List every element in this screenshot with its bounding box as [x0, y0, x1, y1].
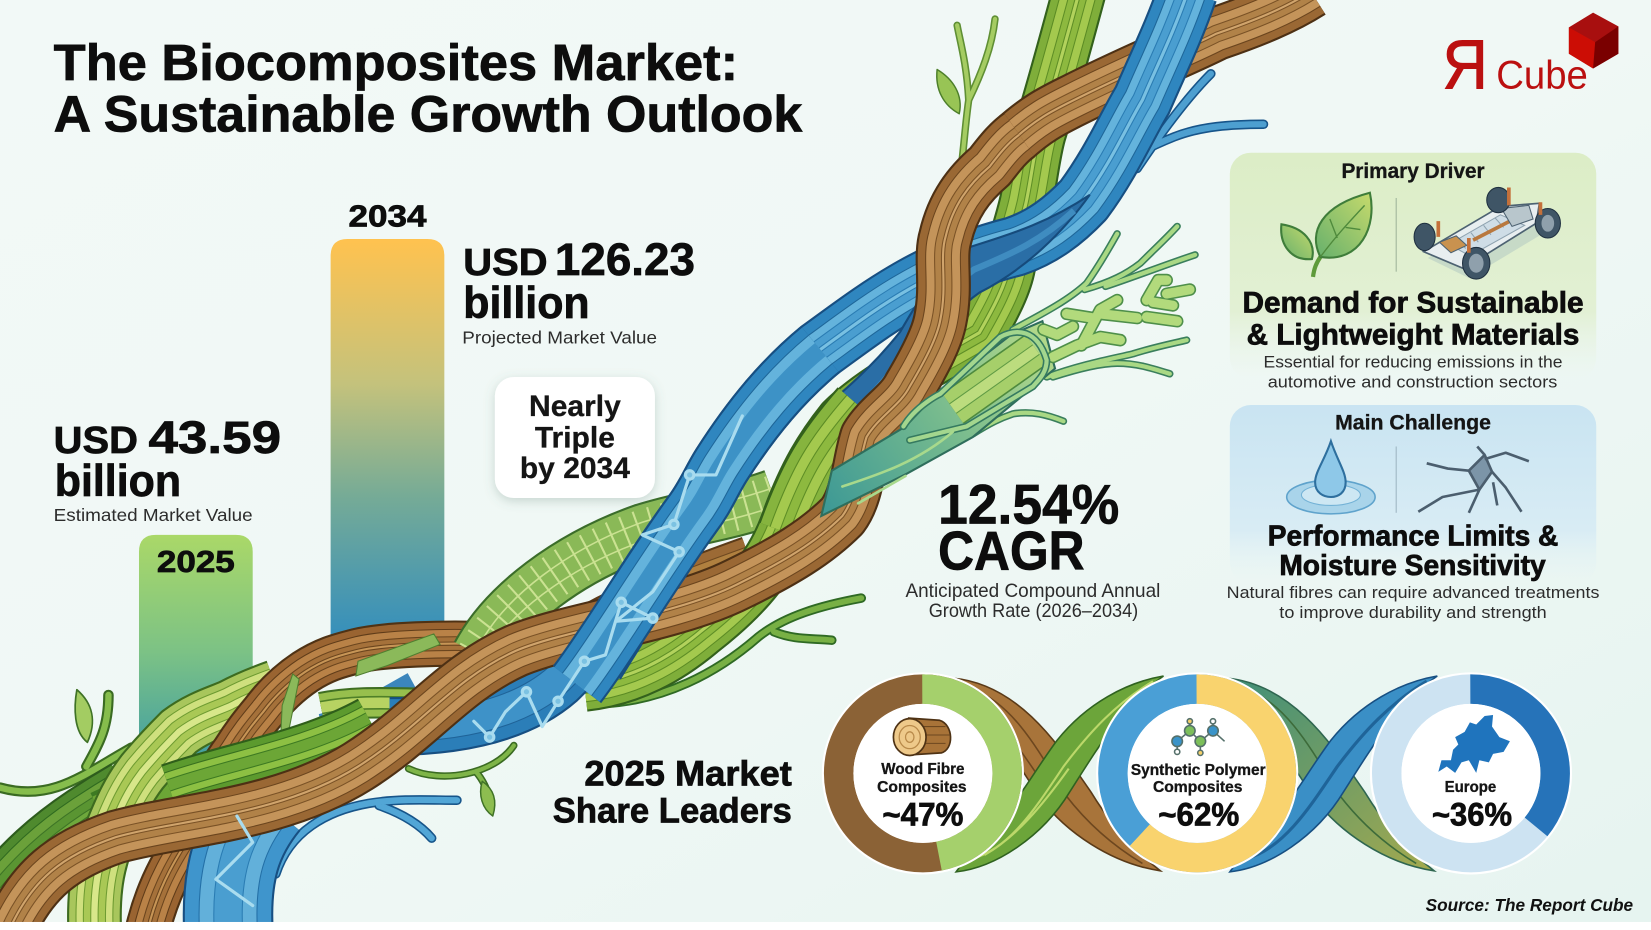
vine: left with leaf — [0, 690, 132, 792]
logo: RCube: Я — [1443, 25, 1488, 103]
strand: brown arch — [147, 644, 495, 930]
stat: CAGR: CAGR — [938, 520, 1085, 582]
frayed algae fibre bundle — [821, 226, 1195, 516]
strand: green over dark blue — [784, 405, 858, 532]
heading: demand: Demand for Sustainable — [1242, 287, 1584, 320]
strand: blue bottom — [228, 802, 265, 930]
vine: top with leaf — [937, 19, 995, 216]
donut: synthetic polymer composites: Composites — [1153, 779, 1242, 796]
description: challenge: Natural fibres can require advanced treatments — [1227, 583, 1599, 602]
donut: wood fibre composites: Composites — [877, 779, 967, 796]
ribbon: blue connector — [1230, 676, 1437, 872]
heading: performance limits: Performance Limits & — [1268, 520, 1558, 552]
heading: performance limits — [1268, 520, 1558, 582]
icon: water drop — [1287, 441, 1375, 514]
callout: nearly triple: by 2034 — [520, 452, 630, 485]
fraying blue fibres top — [1095, 74, 1264, 184]
stat: USD 43.59 billion: 43.59 — [148, 412, 281, 463]
strand: mid green horizontal — [168, 718, 369, 786]
description: driver: automotive and construction sectors — [1268, 373, 1557, 392]
stat: CAGR — [906, 472, 1160, 622]
strand: dark blue band — [827, 195, 1090, 442]
stat: USD 43.59 billion: billion — [55, 457, 181, 506]
divider — [1395, 446, 1397, 513]
heading: market share leaders: 2025 Market — [584, 756, 792, 794]
heading: performance limits: Moisture Sensitivity — [1279, 550, 1546, 582]
algae loop — [842, 332, 1047, 503]
title: A Sustainable Growth Outlook — [54, 86, 803, 143]
stat: USD 126.23 billion: Projected Market Value — [462, 327, 657, 347]
strand: mid green behind — [100, 781, 184, 813]
description: driver — [1264, 352, 1563, 392]
fibre braid illustration — [0, 0, 1311, 930]
strand: brown lower back — [569, 553, 748, 632]
icon: leaf — [1281, 193, 1372, 277]
donut: wood fibre composites: ~47% — [882, 796, 963, 833]
description: challenge: to improve durability and strength — [1279, 603, 1547, 622]
algae inner bundle — [953, 350, 1036, 409]
strand: blue lower section — [390, 632, 605, 727]
strand: light green — [94, 687, 276, 930]
icon: log — [893, 718, 951, 756]
vine: right middle — [605, 598, 861, 703]
stat: USD 126.23 billion: USD — [463, 242, 548, 284]
donut: synthetic polymer composites: Synthetic Polymer — [1131, 762, 1266, 779]
icon: molecule — [1172, 719, 1225, 756]
bar: 2025 — [139, 535, 253, 769]
stat: USD 43.59 billion — [54, 412, 281, 525]
callout: nearly triple — [495, 377, 655, 498]
bar: 2034 — [331, 239, 444, 653]
donut: synthetic polymer composites — [1096, 672, 1298, 874]
title: The Biocomposites Market: — [54, 34, 738, 91]
label: 2034: 2034 — [349, 199, 426, 233]
strand: blue main — [595, 0, 1188, 663]
heading: demand — [1242, 287, 1584, 351]
title — [54, 34, 803, 143]
strand: upper brown behind blue — [1013, 0, 1311, 140]
vine: lower right with leaf — [409, 746, 514, 816]
ribbon: olive connector — [1227, 678, 1434, 871]
stat: USD 43.59 billion: USD — [54, 420, 138, 462]
stat: USD 126.23 billion: billion — [463, 279, 590, 328]
logo: RCube: Cube — [1496, 53, 1588, 97]
heading: main challenge: Main Challenge — [1335, 412, 1491, 435]
ribbon: green connector — [956, 676, 1163, 872]
chain pattern on blue — [216, 416, 742, 906]
stat: CAGR: Anticipated Compound Annual — [906, 581, 1160, 602]
source note: Source: The Report Cube — [1426, 895, 1633, 915]
callout: nearly triple: Triple — [535, 422, 615, 455]
strand: upper green — [584, 0, 1079, 684]
algae thin fibres — [973, 226, 1195, 434]
stat: CAGR: 12.54% — [938, 472, 1119, 535]
heading: market share leaders: Share Leaders — [553, 792, 792, 830]
donut: europe: ~36% — [1432, 796, 1512, 833]
heading: primary driver: Primary Driver — [1341, 160, 1485, 183]
strand: blue over brown mid — [577, 350, 820, 684]
fraying blue fibres bottom — [276, 800, 457, 874]
stat: USD 43.59 billion: Estimated Market Value — [54, 505, 253, 525]
heading: market share leaders — [553, 756, 792, 830]
logo: RCube — [1443, 13, 1618, 103]
ribbon: brown connector — [953, 678, 1160, 871]
stat: USD 126.23 billion: 126.23 — [555, 234, 695, 285]
description: driver: Essential for reducing emissions in the — [1264, 352, 1563, 371]
icon: crack — [1418, 446, 1529, 513]
donut: wood fibre composites: Wood Fibre — [881, 761, 964, 778]
detail: green patches on arch — [280, 634, 440, 750]
donut: europe — [1370, 672, 1572, 874]
donut: synthetic polymer composites: ~62% — [1158, 796, 1239, 833]
algae body — [821, 321, 1055, 516]
donut: wood fibre composites — [822, 672, 1024, 874]
label: 2025: 2025 — [157, 545, 235, 579]
callout: nearly triple: Nearly — [529, 390, 621, 423]
panel: main challenge — [1227, 405, 1599, 622]
algae capsules — [1043, 280, 1190, 357]
description: challenge — [1227, 583, 1599, 622]
heading: demand: & Lightweight Materials — [1247, 318, 1579, 351]
stat: CAGR: Growth Rate (2026–2034) — [929, 601, 1138, 622]
strand: main brown — [8, 135, 1019, 930]
strand: green bars in loop — [321, 703, 432, 708]
divider — [1395, 198, 1397, 272]
donut: europe: Europe — [1445, 779, 1496, 796]
panel: primary driver — [1230, 153, 1596, 392]
icon: europe map — [1438, 715, 1510, 773]
strand: scaled light green — [479, 488, 774, 664]
stat: USD 126.23 billion — [462, 234, 695, 347]
strand: blue peek in loop — [321, 682, 413, 724]
strand: dark green left — [0, 790, 126, 906]
bottom white strip — [0, 922, 1651, 930]
icon: EV chassis — [1414, 187, 1560, 279]
